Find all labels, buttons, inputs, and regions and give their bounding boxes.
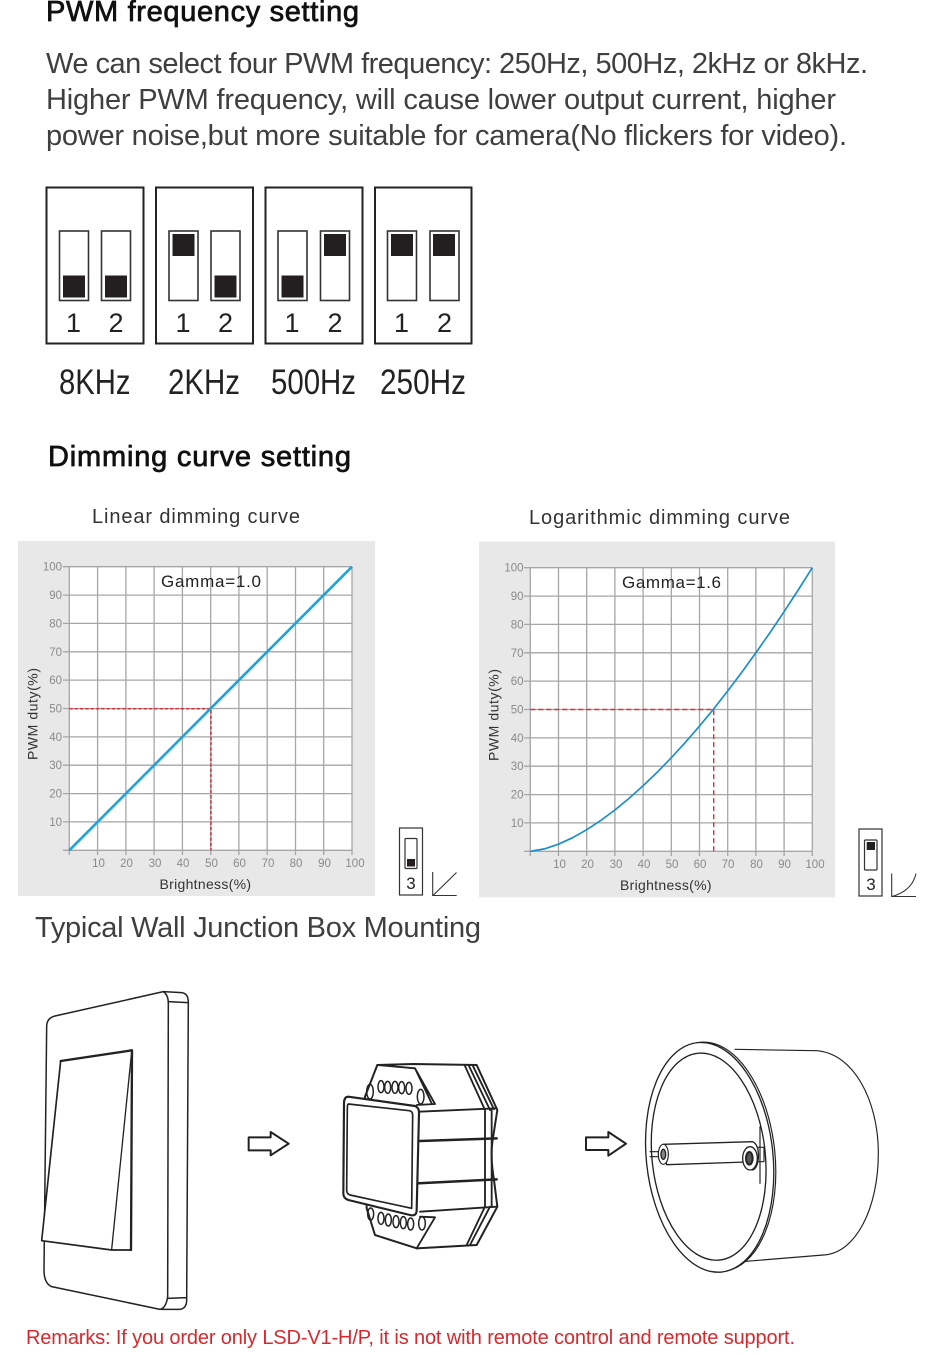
x axis tick labels: 40 <box>177 858 189 870</box>
chart: linear dimming curve <box>18 541 375 896</box>
illustration: wall switch <box>42 992 188 1309</box>
switch: 8KHz both down: 2 <box>108 308 124 338</box>
axis title: Brightness: Brightness(%) <box>160 876 251 892</box>
arrow: switch to module <box>249 1132 289 1155</box>
y axis tick labels: 80 <box>511 620 524 632</box>
terminal holes: top <box>367 1081 424 1104</box>
axis title: Brightness: Brightness(%) <box>620 877 712 893</box>
terminal holes: bottom <box>368 1208 425 1230</box>
line: gamma 1.6 <box>530 568 812 851</box>
x axis tick labels: 80 <box>290 858 302 870</box>
y axis tick labels: 80 <box>49 618 62 630</box>
label: 8KHz: 8KHz <box>59 363 130 402</box>
icon: DIP switch 3 up, logarithmic: 3 <box>866 875 876 894</box>
y axis tick labels: 70 <box>49 647 62 659</box>
switch: 250Hz both up: 2 <box>437 308 452 338</box>
y axis tick labels: 40 <box>49 732 62 744</box>
chart title: Logarithmic dimming curve: Logarithmic dimming curve <box>529 507 790 529</box>
remarks note: Remarks: If you order only LSD-V1-H/P, it is not with remote control and remote support. <box>26 1327 795 1349</box>
label: 500Hz: 500Hz <box>271 363 356 402</box>
arrow: module to junction box <box>586 1132 626 1156</box>
y axis tick labels: 30 <box>511 761 524 773</box>
y axis tick labels: 100 <box>43 562 62 574</box>
line: gamma 1.0 <box>69 567 352 850</box>
axis title: PWM duty: PWM duty(%) <box>486 669 502 761</box>
switch: 8KHz both down <box>46 188 144 344</box>
y axis tick labels: 10 <box>511 818 524 830</box>
x axis tick labels: 50 <box>205 858 218 870</box>
y axis tick labels: 60 <box>511 676 524 688</box>
x axis tick labels: 20 <box>120 858 133 870</box>
y axis tick labels: 30 <box>49 760 62 772</box>
icon: DIP switch 3 down, linear <box>400 828 457 896</box>
x axis tick labels: 30 <box>149 858 161 870</box>
y axis tick labels: 20 <box>511 790 524 802</box>
y axis tick labels: 90 <box>49 590 62 602</box>
y axis tick labels: 40 <box>511 733 524 745</box>
switch: 2KHz up down: 1 <box>175 308 191 338</box>
label: Gamma=1.0: Gamma=1.0 <box>161 572 261 591</box>
illustration: LED dimmer module <box>343 1064 497 1248</box>
y axis tick labels: 50 <box>511 704 524 716</box>
x axis tick labels: 100 <box>805 859 825 871</box>
reference line: 50 percent <box>530 710 714 851</box>
switch: 250Hz both up <box>375 188 472 344</box>
y axis tick labels: 90 <box>511 591 524 603</box>
y axis tick labels <box>43 562 62 829</box>
x axis tick labels: 70 <box>262 858 274 870</box>
text block: PWM frequency description: We can select four PWM frequency: 250Hz, 500Hz, 2kHz or 8kHz. <box>46 48 868 80</box>
label: Gamma=1.6: Gamma=1.6 <box>622 573 721 592</box>
x axis tick labels: 50 <box>666 859 678 871</box>
y axis tick labels: 10 <box>49 817 62 829</box>
switch: 2KHz up down: 2 <box>218 308 233 338</box>
text block: PWM frequency description <box>46 48 868 152</box>
switch: 250Hz both up: 1 <box>394 308 409 338</box>
chart title: Linear dimming curve: Linear dimming curve <box>92 506 300 528</box>
x axis tick labels: 60 <box>233 858 246 870</box>
x axis tick labels: 20 <box>581 859 594 871</box>
x axis tick labels: 90 <box>778 859 791 871</box>
y axis tick labels <box>504 562 524 830</box>
x axis tick labels: 30 <box>610 859 622 871</box>
y axis tick labels: 50 <box>49 704 62 716</box>
x axis tick labels: 70 <box>722 859 734 871</box>
axis title: PWM duty: PWM duty(%) <box>24 668 40 760</box>
x axis tick labels <box>553 859 825 871</box>
icon: DIP switch 3 down, linear: 3 <box>406 874 416 893</box>
x axis tick labels: 90 <box>318 858 331 870</box>
x axis tick labels: 10 <box>92 858 105 870</box>
switch: 500Hz down up: 2 <box>327 308 343 338</box>
module front face <box>343 1097 419 1215</box>
y axis tick labels: 20 <box>49 788 62 800</box>
x axis tick labels: 10 <box>553 859 566 871</box>
y axis tick labels: 60 <box>49 675 62 687</box>
x axis tick labels: 60 <box>694 859 706 871</box>
x axis tick labels: 100 <box>345 858 365 870</box>
label: 250Hz: 250Hz <box>380 363 466 402</box>
switch: 8KHz both down: 1 <box>66 308 81 338</box>
x axis tick labels <box>92 858 365 870</box>
mounting tube and screw posts <box>650 1127 764 1183</box>
y axis tick labels: 100 <box>504 562 524 574</box>
reference line: 50 percent <box>69 709 211 850</box>
switch: 2KHz up down <box>156 188 253 344</box>
chart: logarithmic dimming curve <box>479 542 835 897</box>
heading: Typical Wall Junction Box Mounting: Typical Wall Junction Box Mounting <box>35 912 481 944</box>
x axis tick labels: 80 <box>750 859 763 871</box>
text block: PWM frequency description: Higher PWM frequency, will cause lower output current, higher <box>46 84 836 116</box>
y axis tick labels: 70 <box>511 648 524 660</box>
switch: 500Hz down up <box>266 188 362 344</box>
illustration: round junction box <box>635 1036 878 1279</box>
panel: DIP switch settings <box>46 188 472 402</box>
switch: 500Hz down up: 1 <box>284 308 300 338</box>
heading: Dimming curve setting: Dimming curve setting <box>48 441 351 473</box>
x axis tick labels: 40 <box>638 859 650 871</box>
text block: PWM frequency description: power noise,but more suitable for camera(No flickers for video). <box>46 120 847 152</box>
icon: DIP switch 3 up, logarithmic <box>859 829 916 896</box>
label: 2KHz: 2KHz <box>168 363 240 402</box>
